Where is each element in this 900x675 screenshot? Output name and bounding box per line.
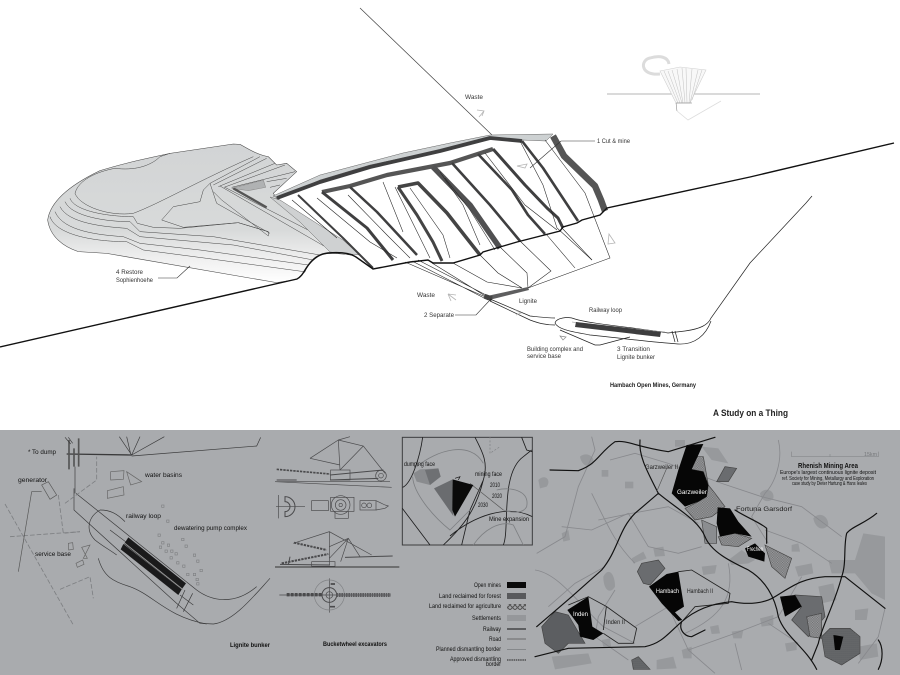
swatch railway [507, 628, 526, 630]
white background [0, 0, 900, 430]
excavator elevation 2 [275, 532, 399, 567]
label Inden: Inden [573, 612, 588, 618]
inset title: Mine expansion [489, 516, 529, 523]
label water basins: water basins [144, 473, 182, 479]
bunker blocks [124, 537, 186, 589]
label waste lower: Waste [417, 293, 436, 299]
railway loop, conveyor and bunker [490, 196, 812, 345]
labels: inset map [404, 462, 529, 523]
open mines [567, 444, 843, 650]
bucketwheel excavator drawings [275, 437, 399, 613]
ground line [0, 143, 894, 347]
label mining face: mining face [475, 472, 503, 478]
scale text: 15km [864, 452, 877, 458]
excavator plan row [276, 495, 388, 518]
labels: map [573, 452, 877, 626]
legend open mines: Open mines [474, 583, 501, 589]
legend approved border line two: border [486, 662, 501, 668]
swatch settlements [507, 615, 526, 621]
label generator: generator [18, 478, 47, 484]
swatch planned border [507, 648, 526, 650]
legend railway: Railway [483, 627, 501, 633]
label lignite bunker: Lignite bunker [617, 355, 655, 361]
conveyor to separator [487, 287, 529, 300]
separator node [484, 294, 493, 301]
pipes [65, 437, 270, 624]
label Garzweiler: Garzweiler [677, 490, 707, 496]
label railway loop: Railway loop [589, 308, 623, 314]
thumbnail sketch top right [607, 57, 760, 120]
heading lignite bunker: Lignite bunker [230, 643, 271, 649]
label Sophienhoehe: Sophienhoehe [116, 278, 154, 284]
label Inden II: Inden II [606, 620, 625, 626]
inset routes [402, 437, 532, 545]
label transition: 3 Transition [617, 347, 650, 353]
labels: top drawing [116, 95, 655, 361]
excavator elevation 1 [275, 437, 392, 487]
legend agriculture: Land reclaimed for agriculture [429, 604, 502, 610]
inset settlements and dumping face [413, 468, 441, 485]
reclaimed land [542, 457, 860, 669]
inset frame [402, 437, 532, 545]
label railway loop: railway loop [126, 514, 162, 520]
label Garzweiler II: Garzweiler II [645, 465, 678, 471]
dashed site lines [5, 457, 97, 625]
map title: Rhenish Mining Area [798, 463, 858, 470]
caption: Hambach Open Mines, Germany [610, 383, 697, 389]
isometric drawing of the open mine [0, 8, 894, 347]
thin cut lines [292, 140, 610, 300]
planned extensions [568, 570, 730, 643]
year 2010: 2010 [490, 483, 500, 489]
map credit: case study by Dieter Hartung & Hans Ieales [792, 481, 867, 487]
long guide line [360, 8, 492, 135]
label Frechen: Frechen [747, 547, 763, 553]
dewatering pump points [158, 505, 202, 585]
current mine face [434, 479, 453, 516]
legend settlements: Settlements [472, 616, 501, 622]
swatch agriculture [507, 604, 526, 610]
scale bar [792, 452, 878, 457]
label service base: service base [527, 354, 562, 360]
inset map: mine expansion [402, 437, 532, 545]
leader lines [158, 141, 595, 315]
swatch approved border [507, 659, 526, 661]
map subtitle: Europe's largest continuous lignite deposit [780, 470, 877, 476]
label to dump: * To dump [28, 450, 57, 456]
label dumping face: dumping face [404, 462, 436, 468]
restored mound Sophienhoehe [48, 144, 360, 283]
legend road: Road [489, 637, 501, 643]
gray bottom panel [0, 430, 900, 675]
label dewatering: dewatering pump complex [174, 526, 247, 532]
swatch forest [507, 593, 526, 599]
map reference: ref. Society for Mining, Metallurgy and Exploration [782, 476, 874, 482]
plan: lignite bunker site [5, 437, 270, 625]
railways and motorways [535, 437, 885, 669]
label Hambach II: Hambach II [687, 589, 713, 595]
label separate: 2 Separate [424, 313, 455, 319]
legend [429, 582, 526, 668]
year 2020: 2020 [492, 494, 502, 500]
legend planned border: Planned dismantling border [436, 647, 501, 653]
heading bucketwheel excavators: Bucketwheel excavators [323, 642, 388, 648]
swatch road [507, 638, 526, 640]
Rhenish mining area map [535, 437, 885, 673]
label restore: 4 Restore [116, 270, 144, 276]
legend forest: Land reclaimed for forest [439, 594, 501, 600]
main title: A Study on a Thing [713, 408, 788, 418]
label waste upper: Waste [465, 95, 484, 101]
label cut and mine: 1 Cut & mine [597, 139, 631, 145]
label Hambach: Hambach [656, 589, 679, 595]
label lignite: Lignite [519, 299, 538, 305]
legend approved border: Approved dismantling [450, 657, 501, 663]
top light strip [273, 134, 553, 198]
excavator plan 2 [279, 578, 391, 613]
label service base: service base [35, 552, 72, 558]
mine benches [270, 134, 610, 301]
water basins and buildings [68, 471, 142, 567]
settlements [538, 440, 885, 669]
flow arrows [448, 110, 615, 315]
labels: plan [18, 450, 388, 649]
label building complex: Building complex and [527, 347, 583, 353]
swatch open mines [507, 582, 526, 588]
lignite bunker [575, 322, 661, 337]
wedge over the mine's left end [270, 197, 360, 255]
label Fortuna Garsdorf: Fortuna Garsdorf [736, 507, 792, 513]
thin roads [535, 437, 885, 673]
year 2030: 2030 [478, 503, 488, 509]
